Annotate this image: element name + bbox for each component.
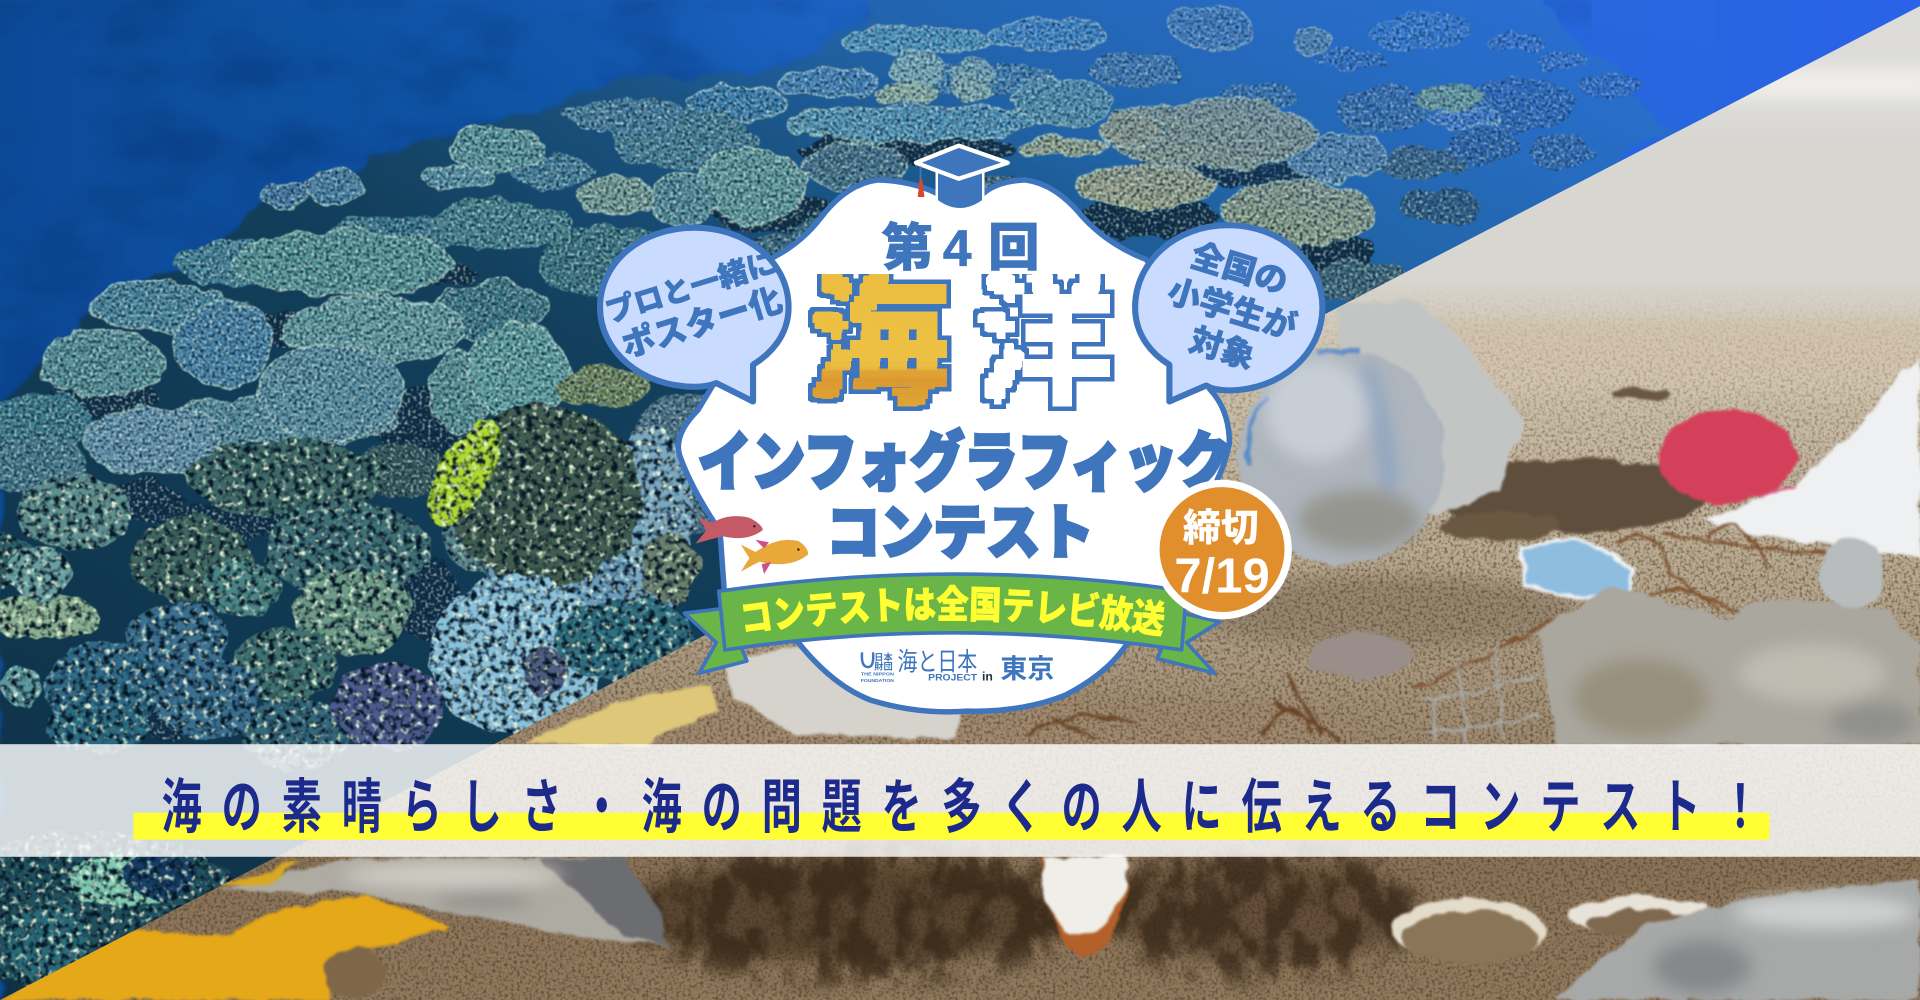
nippon foundation name 財団: 財団 [874, 661, 893, 672]
bubble right text line 3: 対象 [1185, 322, 1259, 377]
debris and plastics [0, 300, 1920, 1000]
wire mesh [1425, 646, 1539, 742]
plastic bag front [1239, 349, 1445, 564]
speech bubble: right [1135, 225, 1322, 401]
nippon foundation name latin 1: THE NIPPON [861, 672, 894, 678]
translucent tagline band [0, 744, 1920, 857]
bubble left text line 2: ポスター化 [618, 282, 787, 365]
plastic bag back [1335, 300, 1526, 514]
yellow net under badge [520, 685, 720, 745]
small bottle [1818, 539, 1884, 607]
logo badge [596, 144, 1326, 715]
bottom shells [1391, 898, 1548, 962]
PROJECT word: PROJECT [928, 673, 978, 683]
white shell [1040, 857, 1127, 956]
dark shadow gaps [48, 132, 1374, 743]
branching coral colonies [0, 406, 699, 993]
bottom right bottle [1555, 879, 1920, 1000]
blue face mask [1520, 539, 1633, 596]
dead fish [220, 857, 667, 947]
icon: red fish [696, 516, 763, 543]
badge white shape [678, 180, 1229, 712]
海と日本 logotype: 海と日本 [898, 648, 977, 677]
blurred shore bands [588, 67, 1920, 963]
deadline label: 締切 [1183, 508, 1259, 550]
in word: in [982, 670, 993, 684]
sand clumps texture [634, 845, 1420, 994]
soft tonal shading on debris [343, 359, 1918, 994]
blue haze wash [0, 0, 1714, 367]
tagline yellow highlight [133, 813, 1769, 840]
table corals, mid reef [1011, 80, 1114, 126]
ribbon main arc [719, 574, 1187, 650]
title: 海: 海 [809, 264, 949, 420]
sand grain texture [0, 282, 1920, 1000]
bubble right text line 2: 小学生が [1163, 272, 1301, 347]
white plastic under badge [722, 636, 980, 738]
organiser logo [861, 648, 1054, 684]
large plastic bottle [1539, 586, 1920, 745]
dark sand mound [1433, 459, 1707, 532]
ribbon right tail [1157, 612, 1220, 673]
lower left reef under band [0, 831, 245, 993]
yellow net bottom [0, 896, 453, 1000]
ribbon left tail [684, 608, 747, 673]
title: コンテスト: コンテスト [827, 501, 1093, 566]
icon: yellow fish [741, 540, 808, 574]
rocks at centre back [889, 53, 945, 87]
seaweed clump [1261, 673, 1341, 738]
ribbon text: コンテストは全国テレビ放送 [742, 584, 1165, 637]
graduation cap icon [916, 146, 1008, 209]
shell [1309, 633, 1412, 679]
nippon foundation mark [862, 652, 873, 667]
title: 洋: 洋 [975, 264, 1114, 420]
tagline text: 海の素晴らしさ・海の問題を多くの人に伝えるコンテスト！ [162, 774, 1780, 840]
deadline badge [1152, 480, 1292, 619]
title: インフォグラフィック: インフォグラフィック [698, 428, 1231, 499]
seaweed [1414, 526, 1824, 688]
white plastic sheet [1704, 360, 1920, 559]
edition heading: 第4回 [882, 219, 1040, 277]
in-fill corals [612, 110, 759, 171]
bubble left text line 1: プロと一緒に [602, 246, 780, 329]
東京: 東京 [1000, 654, 1054, 684]
speech bubble: left [600, 228, 789, 401]
deadline date: 7/19 [1174, 549, 1270, 603]
red net [1659, 410, 1796, 503]
ribbon banner [682, 572, 1222, 676]
far reef, blue [989, 20, 1104, 49]
bubble right text line 1: 全国の [1186, 238, 1292, 302]
nippon foundation name 日本: 日本 [874, 651, 893, 662]
nippon foundation name latin 2: FOUNDATION [861, 678, 894, 684]
